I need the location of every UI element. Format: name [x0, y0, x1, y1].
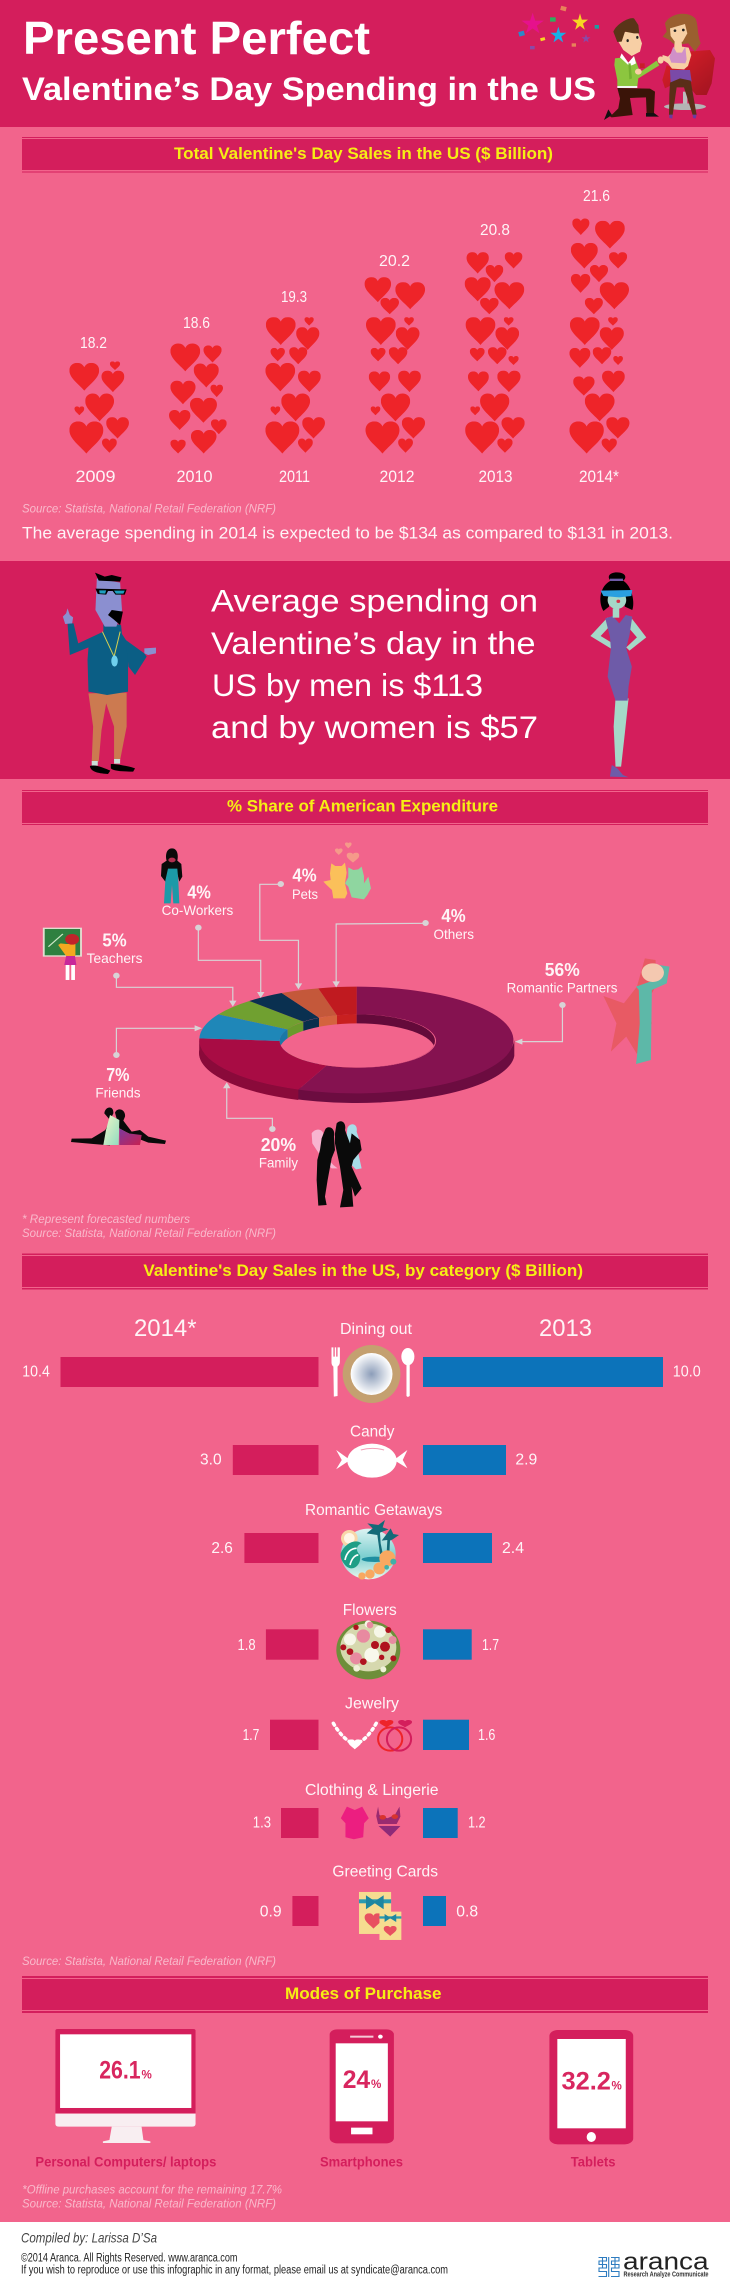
notes: offline and source: *Offline purchases account for the remaining 17.7% [22, 2182, 282, 2196]
section heading: modes of purchase: Modes of Purchase [285, 1984, 442, 2003]
row: jewelry [243, 1695, 495, 1750]
hearts column 2012 [365, 277, 425, 454]
icon: proposing couple [604, 14, 715, 120]
row: clothing and lingerie: 1.3 [253, 1814, 271, 1831]
year labels: 2012 [380, 468, 414, 486]
value 32.2%: 32.2 [562, 2067, 611, 2095]
logo: aranca: aranca [623, 2248, 709, 2275]
icon: necklace and rings [333, 1720, 412, 1751]
label: others: 4% [441, 906, 466, 926]
label: friends [95, 1065, 141, 1101]
row: dining out [22, 1321, 701, 1387]
section heading: share of expenditure: % Share of American Expenditure [227, 797, 498, 816]
row: flowers: 1.8 [238, 1637, 256, 1654]
row: clothing and lingerie [253, 1782, 486, 1838]
hearts column 2011 [265, 317, 325, 454]
slice: friends 7% [199, 1014, 288, 1041]
year labels: 2010 [176, 468, 212, 486]
slice: family 20% [199, 1038, 327, 1090]
values above columns [80, 188, 610, 352]
icon: friends sitting back to back [71, 1107, 166, 1145]
year labels [76, 468, 620, 486]
source note: Source: Statista, National Retail Federation (NRF) [22, 1954, 276, 1968]
icon: tablet [549, 2030, 633, 2144]
label: teachers: Teachers [87, 950, 142, 966]
row: romantic getaways [211, 1502, 524, 1563]
chart: heart pictogram of annual sales [69, 188, 629, 486]
label: Personal Computers/ laptops [35, 2154, 217, 2170]
average spending sentence: The average spending in 2014 is expected to be $134 as compared to $131 in 2013. [22, 524, 673, 542]
values above columns: 20.8 [480, 222, 510, 239]
icon: tropical island [341, 1520, 399, 1580]
column headers: 2013 [539, 1315, 592, 1342]
section heading: total sales: Total Valentine's Day Sales in the US ($ Billion) [174, 144, 553, 163]
label: friends: 7% [106, 1065, 130, 1085]
value 26.1%: % [142, 2067, 152, 2081]
row: romantic getaways: 2.4 [502, 1540, 524, 1557]
icon: shirt and lingerie [341, 1807, 400, 1839]
butterfly chart: sales by category [22, 1315, 701, 1940]
row: flowers [238, 1602, 499, 1660]
panel: smartphones [320, 2029, 403, 2170]
label: others: Others [434, 926, 474, 942]
label: co-workers: Co-Workers [162, 902, 233, 918]
panel: men versus women spending [0, 561, 730, 779]
label: others [434, 906, 474, 942]
notes: forecast and source: * Represent forecasted numbers [22, 1212, 190, 1226]
icon: embracing couple [603, 958, 670, 1064]
slice: others 4% [318, 987, 357, 1015]
value 32.2%: % [612, 2078, 622, 2092]
label: pets: Pets [292, 886, 318, 902]
slice: romantic partners 56% [298, 987, 513, 1093]
copyright: ©2014 Aranca. All Rights Reserved. www.aranca.com [21, 2253, 238, 2265]
icon: flower bouquet [336, 1620, 400, 1679]
label: family [259, 1135, 298, 1171]
reproduction notice: If you wish to reproduce or use this infographic in any format, please email us at syndicate@aranca.com [21, 2264, 448, 2276]
section heading: share of expenditure [22, 790, 708, 825]
statement text [211, 583, 538, 745]
panel: header banner [0, 0, 730, 127]
label: romantic partners: Romantic Partners [507, 980, 617, 996]
row: dining out: Dining out [340, 1321, 413, 1338]
label: family: 20% [261, 1135, 296, 1155]
icon: desktop monitor [55, 2029, 196, 2143]
title: Present Perfect [23, 12, 370, 64]
icon: wrapped candy [336, 1444, 407, 1478]
row: greeting cards [260, 1864, 478, 1926]
label: friends: Friends [95, 1085, 141, 1101]
callout connectors [113, 881, 566, 1132]
section heading: modes of purchase [22, 1976, 708, 2013]
icon: family silhouettes [312, 1121, 362, 1207]
value 26.1%: 26.1 [99, 2056, 141, 2084]
notes: forecast and source: Source: Statista, National Retail Federation (NRF) [22, 1226, 276, 1240]
row: candy [200, 1424, 537, 1475]
icon: stars and confetti [518, 6, 599, 49]
row: dining out: 10.4 [22, 1364, 50, 1381]
values above columns: 19.3 [281, 289, 307, 306]
row: candy: 3.0 [200, 1451, 222, 1468]
icon: woman figure [590, 572, 646, 777]
label: Smartphones [320, 2154, 403, 2170]
statement text: Valentine’s day in the [211, 625, 536, 661]
statement text: US by men is $113 [212, 667, 483, 703]
statement text: and by women is $57 [211, 709, 538, 745]
source note: Source: Statista, National Retail Federation (NRF) [22, 502, 276, 516]
panel: tablets [549, 2030, 633, 2170]
row: greeting cards: Greeting Cards [332, 1864, 438, 1881]
row: flowers: 1.7 [482, 1637, 499, 1654]
icon: co-worker figure [161, 848, 182, 903]
man [610, 88, 655, 117]
chair [662, 50, 715, 95]
icon: smartphone [330, 2029, 394, 2143]
label: co-workers [162, 882, 233, 918]
year labels: 2011 [279, 468, 310, 486]
label: pets: 4% [292, 866, 317, 886]
woman [663, 14, 701, 52]
row: clothing and lingerie: Clothing & Lingerie [305, 1782, 439, 1799]
icon: greeting cards [359, 1892, 401, 1940]
row: clothing and lingerie: 1.2 [468, 1814, 486, 1831]
row: romantic getaways: 2.6 [211, 1540, 233, 1557]
row: greeting cards: 0.8 [456, 1903, 478, 1920]
column headers [134, 1315, 592, 1342]
icon: man figure [63, 573, 156, 774]
row: jewelry: 1.7 [243, 1727, 259, 1744]
label: pets [292, 866, 318, 902]
panel: footer [0, 2222, 730, 2291]
donut side wall [199, 1040, 514, 1103]
statement text: Average spending on [211, 583, 538, 619]
row: jewelry: Jewelry [345, 1695, 399, 1712]
label: family: Family [259, 1155, 298, 1171]
notes: forecast and source [22, 1212, 276, 1240]
year labels: 2009 [76, 468, 116, 486]
logo: aranca [598, 2248, 709, 2279]
slice: pets 4% [282, 988, 337, 1018]
credit: Compiled by: Larissa D’Sa [21, 2230, 157, 2246]
notes: offline and source: Source: Statista, National Retail Federation (NRF) [22, 2197, 276, 2211]
year labels: 2014* [579, 468, 620, 486]
icon: two cats [323, 842, 371, 899]
row: jewelry: 1.6 [478, 1727, 495, 1744]
section heading: total sales [22, 137, 708, 172]
label: teachers [87, 931, 142, 966]
icon: teacher at chalkboard [43, 928, 82, 980]
section heading: sales by category: Valentine's Day Sales in the US, by category ($ Billion) [143, 1261, 583, 1280]
hearts column 2014 [569, 219, 629, 454]
row: romantic getaways: Romantic Getaways [305, 1502, 443, 1519]
label: teachers: 5% [102, 931, 127, 951]
values above columns: 18.2 [80, 335, 107, 352]
donut hole [280, 1014, 435, 1068]
label: romantic partners: 56% [545, 960, 580, 980]
year labels: 2013 [478, 468, 512, 486]
hearts column 2013 [465, 252, 525, 454]
values above columns: 21.6 [583, 188, 610, 205]
row: dining out: 10.0 [673, 1364, 701, 1381]
chart: 3D donut of expenditure share [199, 987, 514, 1103]
label: co-workers: 4% [187, 882, 211, 902]
row: candy: Candy [350, 1424, 395, 1441]
row: greeting cards: 0.9 [260, 1903, 282, 1920]
hearts column 2010 [169, 344, 227, 454]
icon: plate and cutlery [332, 1345, 414, 1403]
hearts column 2009 [69, 361, 129, 454]
values above columns: 18.6 [183, 315, 210, 332]
label: Tablets [571, 2154, 616, 2170]
label: romantic partners [507, 960, 617, 996]
values above columns: 20.2 [379, 253, 410, 270]
panel: personal computers [35, 2029, 217, 2170]
slice: teachers 5% [218, 1001, 303, 1029]
row: flowers: Flowers [343, 1602, 397, 1619]
section heading: sales by category [22, 1254, 708, 1290]
slice: co-workers 4% [249, 993, 319, 1022]
value 24%: % [371, 2077, 382, 2091]
value 24%: 24 [343, 2066, 370, 2094]
subtitle: Valentine’s Day Spending in the US [22, 71, 596, 107]
notes: offline and source [22, 2182, 282, 2211]
row: candy: 2.9 [515, 1451, 537, 1468]
column headers: 2014* [134, 1315, 196, 1342]
